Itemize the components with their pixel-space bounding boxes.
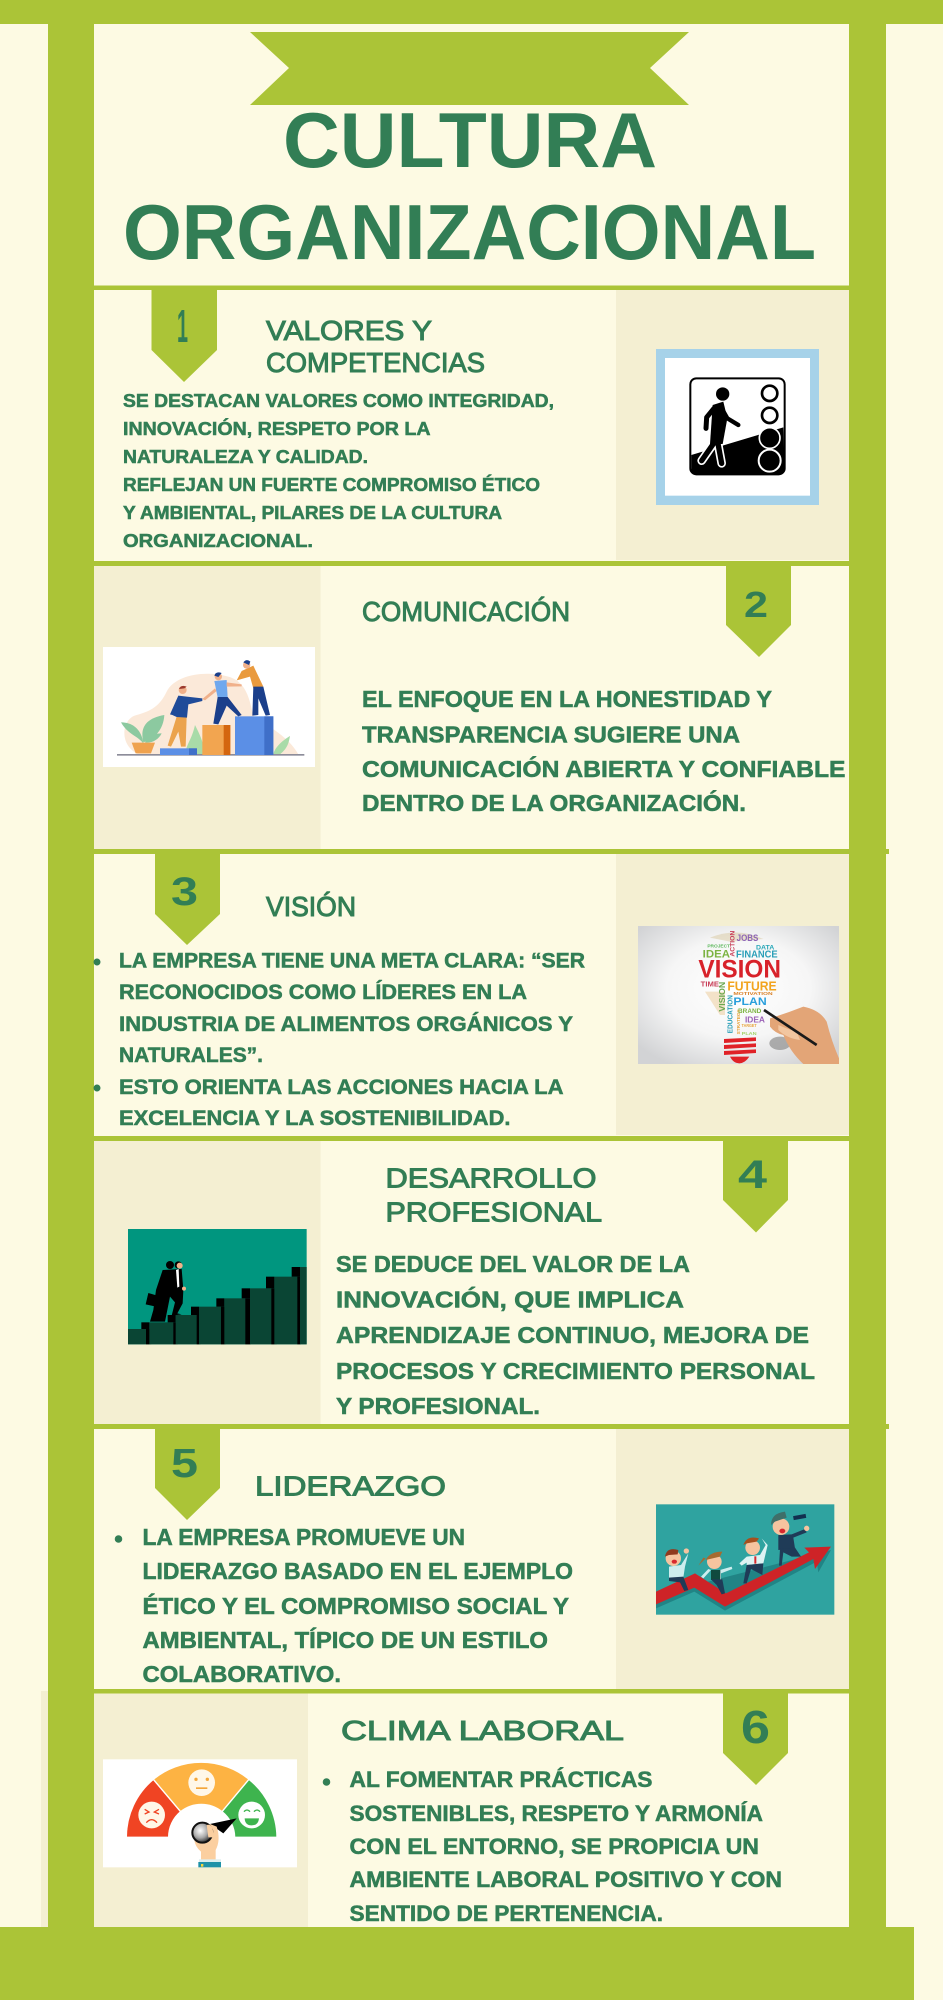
bullet list: clima laboral: CON EL ENTORNO, SE PROPICIA UN bbox=[350, 1834, 759, 1859]
bullet list: liderazgo: AMBIENTAL, TÍPICO DE UN ESTILO bbox=[142, 1626, 548, 1653]
number tag 1 bbox=[152, 290, 217, 382]
heading: valores y competencias bbox=[266, 315, 485, 378]
title bbox=[123, 96, 816, 276]
body text: valores: NATURALEZA Y CALIDAD. bbox=[123, 447, 368, 467]
image: vision word cloud light bulb with hand: BRAND bbox=[738, 1009, 762, 1015]
panel: comunicacion bbox=[94, 561, 849, 849]
number tag 2 bbox=[726, 566, 791, 657]
heading: desarrollo profesional bbox=[386, 1162, 602, 1228]
body text: valores: SE DESTACAN VALORES COMO INTEGRIDAD, bbox=[123, 391, 554, 411]
panel: vision bbox=[94, 849, 889, 1135]
heading: valores y competencias: VALORES Y bbox=[266, 315, 432, 346]
body text: comunicacion: DENTRO DE LA ORGANIZACIÓN. bbox=[362, 789, 746, 816]
body text: desarrollo: PROCESOS Y CRECIMIENTO PERSONAL bbox=[336, 1358, 815, 1384]
image: vision word cloud light bulb with hand: PLAN bbox=[742, 1031, 757, 1036]
title banner ribbon bbox=[250, 32, 689, 105]
body text: desarrollo: INNOVACIÓN, QUE IMPLICA bbox=[336, 1286, 684, 1312]
number tag 4: 4 bbox=[738, 1153, 768, 1197]
number tag 6: 6 bbox=[741, 1701, 770, 1753]
bullet list: liderazgo: LA EMPRESA PROMUEVE UN bbox=[142, 1524, 465, 1550]
icon: person walking beside rising circles bbox=[656, 349, 819, 505]
image: vision word cloud light bulb with hand: PROJECT bbox=[707, 944, 730, 949]
bullet list: clima laboral: AMBIENTE LABORAL POSITIVO Y CON bbox=[350, 1867, 782, 1892]
image: vision word cloud light bulb with hand: STRATEGY bbox=[736, 1008, 741, 1034]
image: vision word cloud light bulb with hand: MOTIVATION bbox=[733, 991, 773, 997]
body text: valores: INNOVACIÓN, RESPETO POR LA bbox=[123, 418, 430, 439]
bullet list: vision bbox=[94, 948, 585, 1130]
number tag 5: 5 bbox=[171, 1440, 198, 1486]
panel: valores y competencias bbox=[94, 286, 849, 560]
number tag 5 bbox=[155, 1429, 220, 1520]
image: mood gauge with hand turning dial bbox=[103, 1759, 297, 1867]
image: vision word cloud light bulb with hand: JOBS bbox=[737, 933, 758, 943]
title: ORGANIZACIONAL bbox=[123, 188, 816, 276]
bullet list: clima laboral bbox=[323, 1767, 782, 1926]
number tag 4 bbox=[723, 1141, 788, 1232]
bullet list: vision: RECONOCIDOS COMO LÍDERES EN LA bbox=[119, 979, 527, 1004]
heading: valores y competencias: COMPETENCIAS bbox=[266, 347, 485, 378]
body text: valores: Y AMBIENTAL, PILARES DE LA CULTURA bbox=[123, 503, 502, 523]
heading: clima laboral: CLIMA LABORAL bbox=[341, 1715, 624, 1746]
body text: valores bbox=[123, 391, 554, 551]
number tag 1: 1 bbox=[177, 300, 188, 352]
panel: liderazgo bbox=[94, 1424, 889, 1689]
image: vision word cloud light bulb with hand: FUTURE bbox=[727, 979, 777, 993]
image: vision word cloud light bulb with hand: TARGET bbox=[742, 1023, 757, 1028]
bullet list: vision: EXCELENCIA Y LA SOSTENIBILIDAD. bbox=[119, 1106, 510, 1130]
body text: desarrollo: SE DEDUCE DEL VALOR DE LA bbox=[336, 1251, 690, 1277]
bullet list: clima laboral: AL FOMENTAR PRÁCTICAS bbox=[350, 1767, 652, 1792]
bullet list: liderazgo: LIDERAZGO BASADO EN EL EJEMPLO bbox=[142, 1558, 573, 1584]
image: business person climbing stairs bbox=[128, 1229, 307, 1344]
body text: comunicacion: TRANSPARENCIA SUGIERE UNA bbox=[362, 722, 740, 748]
image: vision word cloud light bulb with hand bbox=[638, 926, 839, 1064]
image: vision word cloud light bulb with hand: PLAN bbox=[733, 996, 767, 1008]
bullet list: liderazgo: COLABORATIVO. bbox=[142, 1661, 341, 1687]
image: vision word cloud light bulb with hand: ACTION bbox=[731, 931, 737, 957]
panel: clima laboral bbox=[94, 1689, 849, 1927]
bottom green bar bbox=[0, 1927, 914, 2000]
image: vision word cloud light bulb with hand: VISION bbox=[718, 981, 727, 1012]
bullet list: vision: INDUSTRIA DE ALIMENTOS ORGÁNICOS Y bbox=[119, 1011, 573, 1036]
body text: desarrollo bbox=[336, 1251, 815, 1419]
body text: comunicacion: COMUNICACIÓN ABIERTA Y CONFIABLE bbox=[362, 755, 846, 782]
panel: desarrollo profesional bbox=[94, 1136, 849, 1424]
body text: valores: REFLEJAN UN FUERTE COMPROMISO ÉTICO bbox=[123, 474, 540, 495]
image: team helping each other climb steps bbox=[103, 647, 315, 767]
bullet list: liderazgo bbox=[115, 1524, 573, 1687]
bullet list: liderazgo: ÉTICO Y EL COMPROMISO SOCIAL Y bbox=[142, 1592, 569, 1619]
bullet list: vision: ESTO ORIENTA LAS ACCIONES HACIA LA bbox=[119, 1075, 564, 1099]
image: team climbing a red arrow bbox=[656, 1504, 834, 1615]
body text: valores: ORGANIZACIONAL. bbox=[123, 531, 313, 551]
body text: comunicacion: EL ENFOQUE EN LA HONESTIDAD Y bbox=[362, 686, 772, 712]
heading: vision: VISIÓN bbox=[266, 891, 356, 922]
body text: desarrollo: Y PROFESIONAL. bbox=[336, 1393, 540, 1419]
bullet list: vision: NATURALES”. bbox=[119, 1043, 263, 1067]
image: vision word cloud light bulb with hand: EDUCATION bbox=[726, 995, 735, 1033]
image: vision word cloud light bulb with hand: IDEA bbox=[703, 949, 730, 961]
heading: comunicacion: COMUNICACIÓN bbox=[362, 596, 570, 627]
image: vision word cloud light bulb with hand: TIME bbox=[701, 979, 719, 988]
image: vision word cloud light bulb with hand: DATA bbox=[756, 945, 775, 952]
bullet list: clima laboral: SOSTENIBLES, RESPETO Y ARMONÍA bbox=[350, 1801, 763, 1826]
heading: desarrollo profesional: DESARROLLO bbox=[386, 1162, 596, 1194]
heading: liderazgo: LIDERAZGO bbox=[255, 1470, 446, 1502]
bullet list: vision: LA EMPRESA TIENE UNA META CLARA: “SER bbox=[119, 948, 585, 972]
image: vision word cloud light bulb with hand: IDEA bbox=[745, 1014, 766, 1024]
number tag 3: 3 bbox=[171, 870, 198, 914]
bullet list: clima laboral: SENTIDO DE PERTENENCIA. bbox=[350, 1901, 663, 1926]
number tag 3 bbox=[155, 854, 220, 945]
image: vision word cloud light bulb with hand: FINANCE bbox=[736, 949, 778, 960]
heading: desarrollo profesional: PROFESIONAL bbox=[386, 1196, 602, 1228]
body text: desarrollo: APRENDIZAJE CONTINUO, MEJORA DE bbox=[336, 1322, 809, 1348]
title: CULTURA bbox=[283, 96, 657, 184]
image: vision word cloud light bulb with hand: VISION bbox=[698, 956, 781, 984]
number tag 6 bbox=[723, 1693, 788, 1785]
body text: comunicacion bbox=[362, 686, 846, 816]
number tag 2: 2 bbox=[744, 584, 768, 625]
